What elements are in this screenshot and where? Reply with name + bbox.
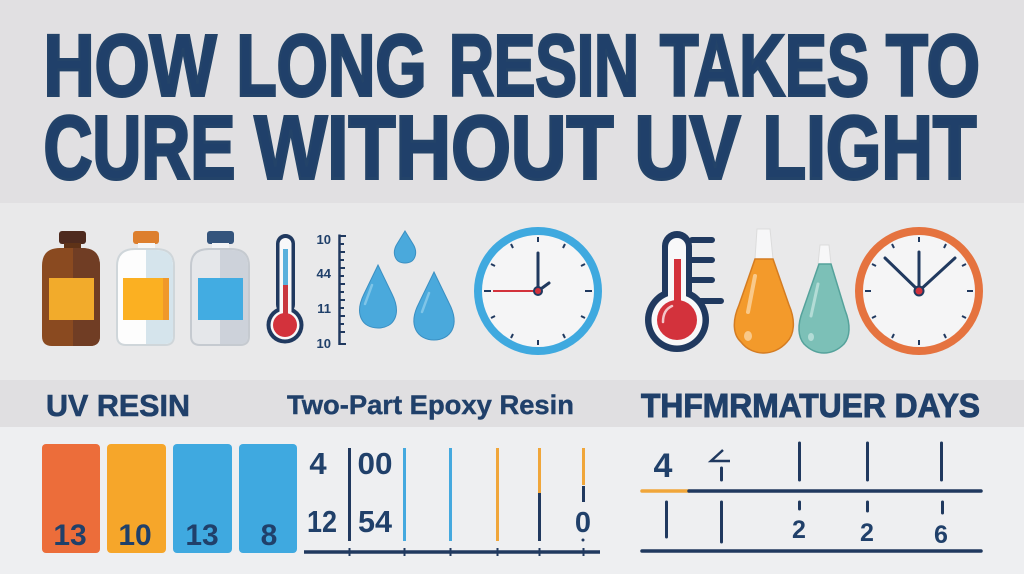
heading: temperature days: THFMRMATUER DAYS xyxy=(641,387,980,424)
line chart: temperature days: 2 xyxy=(860,519,874,547)
bar: blue 8: 8 xyxy=(261,519,277,552)
scale with numbers xyxy=(317,232,346,351)
title: UV xyxy=(634,98,740,198)
line chart: temperature days: 2 xyxy=(792,516,806,544)
icon: brown resin bottle xyxy=(42,231,100,346)
icon: orange flask xyxy=(734,229,793,353)
line chart: temperature days: 6 xyxy=(934,521,948,549)
heading: UV resin: UV RESIN xyxy=(46,388,190,423)
icon: water drops xyxy=(360,231,454,340)
line chart: two-part epoxy resin: 12 xyxy=(307,504,337,539)
icon: blue clock xyxy=(478,231,598,351)
bar: blue 13: 13 xyxy=(185,519,219,552)
icon: orange clock xyxy=(859,231,979,351)
icon: slim thermometer xyxy=(266,234,304,344)
title: TO xyxy=(886,18,980,114)
bar: orange 13: 13 xyxy=(53,519,87,552)
title: WITHOUT xyxy=(254,98,614,198)
scale with numbers: 10 xyxy=(317,232,331,247)
scale with numbers: 11 xyxy=(317,301,331,316)
line chart: two-part epoxy resin: 4 xyxy=(309,446,327,481)
bar chart: UV resin xyxy=(42,444,297,553)
bar: blue 13 xyxy=(173,444,232,553)
bar: orange 13 xyxy=(42,444,100,553)
title xyxy=(44,18,980,198)
line chart: two-part epoxy resin: 0 xyxy=(575,507,591,539)
title: TAKES xyxy=(660,18,869,114)
icon: large thermometer xyxy=(645,231,721,352)
icon: teal flask xyxy=(799,245,849,353)
line chart: two-part epoxy resin xyxy=(304,446,600,556)
scale with numbers: 10 xyxy=(317,336,331,351)
title: RESIN xyxy=(449,18,639,114)
title: LONG xyxy=(236,18,426,114)
line chart: temperature days: 4 xyxy=(654,447,673,485)
line chart: temperature days xyxy=(642,443,981,551)
icon: grey bottle with blue label xyxy=(191,231,249,345)
icon: white bottle with orange cap xyxy=(117,231,174,345)
bar: amber 10 xyxy=(107,444,166,553)
heading: two-part epoxy resin: Two-Part Epoxy Resin xyxy=(287,390,574,420)
line chart: two-part epoxy resin: 54 xyxy=(358,504,393,539)
title: HOW xyxy=(44,18,217,114)
scale with numbers: 44 xyxy=(317,266,332,281)
title: CURE xyxy=(44,98,236,198)
bar: blue 8 xyxy=(239,444,297,553)
bar: amber 10: 10 xyxy=(118,519,152,552)
line chart: two-part epoxy resin: 00 xyxy=(358,446,392,481)
